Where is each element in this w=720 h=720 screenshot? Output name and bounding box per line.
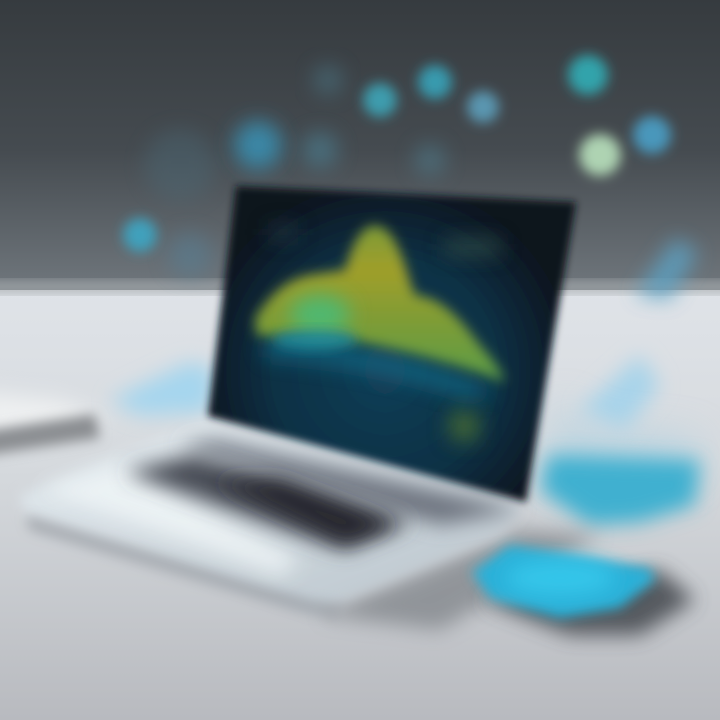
base lower edge xyxy=(25,515,345,620)
laptop shadow xyxy=(320,530,600,630)
left notebook on table xyxy=(0,392,110,456)
right cyan pad xyxy=(540,355,700,525)
base highlight xyxy=(40,465,300,575)
laptop screen xyxy=(208,186,576,502)
mountain chart xyxy=(255,226,505,400)
chart under-glow xyxy=(262,340,495,400)
blue tablet xyxy=(472,545,695,635)
left blue glow xyxy=(110,362,215,415)
laptop base xyxy=(20,420,525,612)
laptop xyxy=(20,186,600,630)
chart green highlight xyxy=(290,295,350,335)
chart teal band xyxy=(273,330,357,350)
background wall xyxy=(0,0,720,300)
table surface xyxy=(0,282,720,720)
keyboard xyxy=(125,455,412,550)
chart small marks xyxy=(268,225,500,440)
tablet shadow xyxy=(480,570,695,635)
rear deck gray xyxy=(180,440,520,525)
floating data icons xyxy=(123,55,698,300)
